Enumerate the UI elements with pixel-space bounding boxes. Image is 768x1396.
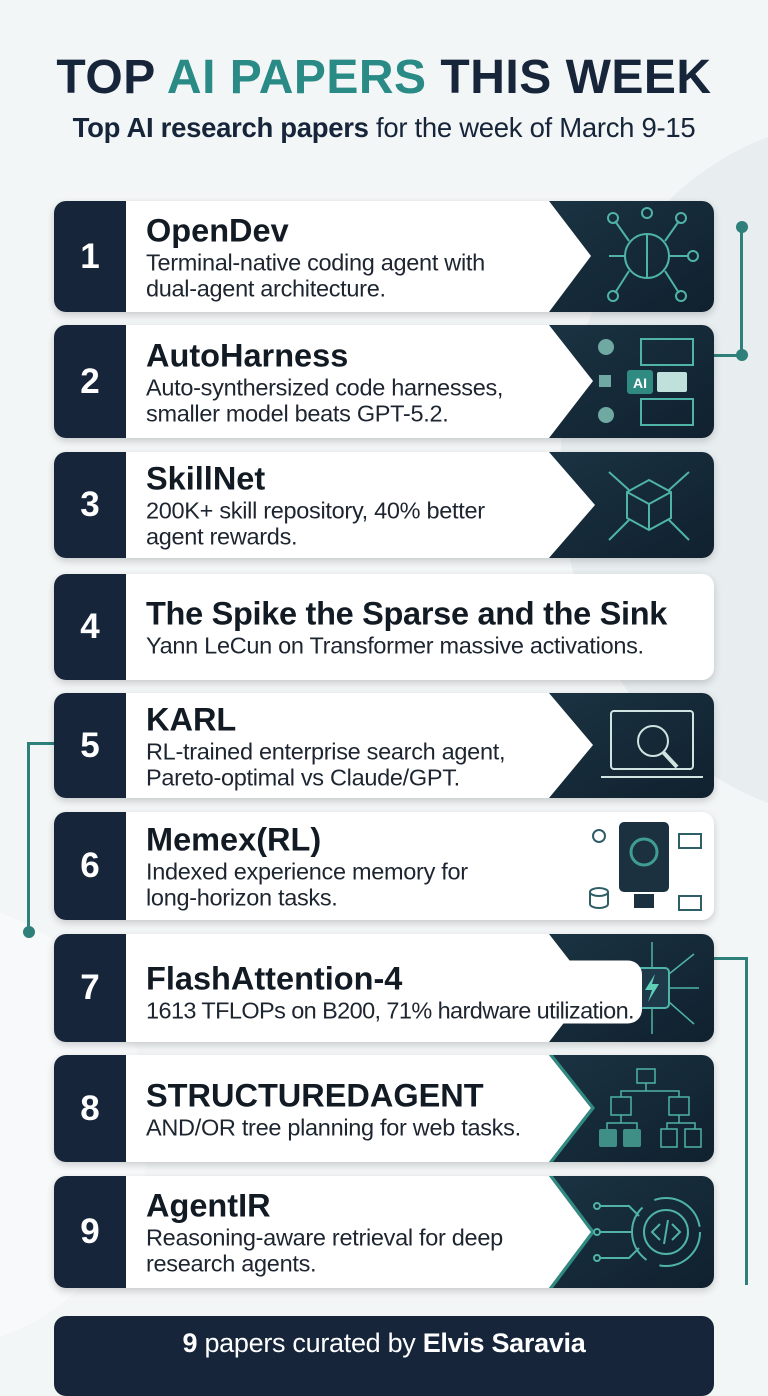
card 9: AgentIR <box>146 1188 271 1224</box>
card 5: KARL <box>146 701 236 737</box>
card 3: 3 <box>80 485 100 524</box>
card 9: research agents. <box>146 1250 316 1276</box>
card 9 <box>54 1176 714 1288</box>
card 5: 5 <box>80 726 100 764</box>
card 7: 7 <box>80 968 100 1007</box>
icon: memory <box>589 822 702 911</box>
card 4 <box>54 574 714 680</box>
card 1: dual-agent architecture. <box>146 275 386 301</box>
card 8: 8 <box>80 1088 100 1128</box>
icon: tree <box>549 1055 714 1162</box>
card 4: 4 <box>80 607 100 646</box>
card 5: RL-trained enterprise search agent, <box>146 738 505 764</box>
connector: left <box>23 742 54 938</box>
footer banner: 9 papers curated by Elvis Saravia <box>183 1328 585 1358</box>
card 7: 1613 TFLOPs on B200, 71% hardware utilization. <box>146 998 634 1024</box>
icon: AI harness <box>549 325 714 438</box>
footer banner <box>54 1316 714 1396</box>
icon: code circuit <box>549 1176 714 1288</box>
icon: chip <box>549 934 714 1042</box>
icon: AI harness: AI <box>633 375 647 391</box>
card 6: 6 <box>80 846 100 885</box>
card 2: AutoHarness <box>146 337 348 373</box>
card 4: The Spike the Sparse and the Sink <box>146 596 667 632</box>
card 1: Terminal-native coding agent with <box>146 249 485 275</box>
card 3: SkillNet <box>146 460 265 496</box>
title: TOP AI PAPERS THIS WEEK <box>56 51 712 104</box>
card 3 <box>54 452 714 558</box>
card 8: AND/OR tree planning for web tasks. <box>146 1114 521 1140</box>
icon: cube network <box>549 452 714 558</box>
card 2: smaller model beats GPT-5.2. <box>146 400 448 426</box>
card 1: 1 <box>80 236 100 276</box>
card 1 <box>54 201 714 312</box>
card 8 <box>54 1055 714 1162</box>
card 2: Auto-synthersized code harnesses, <box>146 374 503 400</box>
subtitle: Top AI research papers for the week of March 9-15 <box>73 112 695 143</box>
connector: right bottom <box>714 957 748 1285</box>
card 5: Pareto-optimal vs Claude/GPT. <box>146 764 460 790</box>
card 6: Memex(RL) <box>146 822 321 858</box>
card 9: Reasoning-aware retrieval for deep <box>146 1224 503 1250</box>
card 6: long-horizon tasks. <box>146 884 338 910</box>
card 8: STRUCTUREDAGENT <box>146 1077 484 1113</box>
card 9: 9 <box>80 1212 100 1251</box>
card 3: agent rewards. <box>146 524 297 550</box>
card 2: 2 <box>80 362 100 400</box>
icon: brain <box>549 201 714 312</box>
card 6: Indexed experience memory for <box>146 858 468 884</box>
card 7: FlashAttention-4 <box>146 961 402 997</box>
card 1: OpenDev <box>146 212 289 248</box>
card 7 <box>54 934 714 1042</box>
card 2 <box>54 325 714 438</box>
card 5 <box>54 693 714 798</box>
card 4: Yann LeCun on Transformer massive activations. <box>146 632 644 658</box>
card 6 <box>54 812 714 920</box>
connector: right top <box>714 221 748 361</box>
icon: search laptop <box>549 693 714 798</box>
card 3: 200K+ skill repository, 40% better <box>146 498 485 524</box>
